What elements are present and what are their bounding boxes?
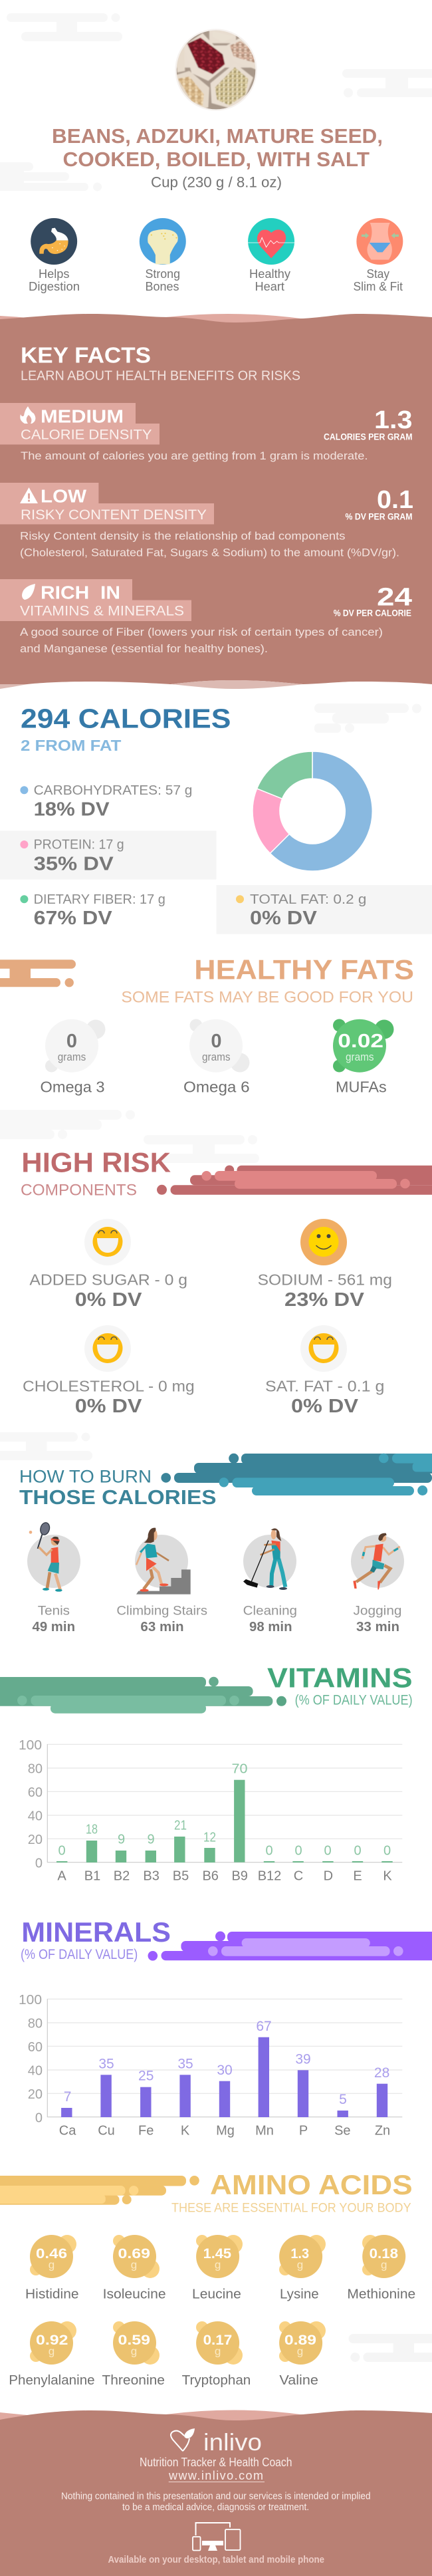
activity: climbing stairs: 63 min <box>140 1620 183 1634</box>
amino: isoleucine: 0.69 <box>118 2246 150 2261</box>
legend: dietary fiber: DIETARY FIBER: 17 g <box>34 892 165 907</box>
heading: amino acids: AMINO ACIDS <box>210 2169 413 2200</box>
x axis labels: B9 <box>231 1868 248 1883</box>
fat: omega 6: Omega 6 <box>183 1079 250 1096</box>
x axis labels: P <box>299 2124 308 2138</box>
title: BEANS, ADZUKI, MATURE SEED, <box>52 125 383 148</box>
legend panels <box>0 831 432 934</box>
icon: smiling face <box>300 1219 347 1265</box>
value labels: 7 <box>64 2089 71 2105</box>
risk: sodium: SODIUM - 561 mg <box>258 1271 392 1289</box>
heading: calories: 294 CALORIES <box>21 703 231 733</box>
title: COOKED, BOILED, WITH SALT <box>62 148 370 171</box>
value labels <box>58 1762 391 1858</box>
fat: omega 6: 0 <box>211 1031 222 1052</box>
x axis labels <box>59 2124 390 2138</box>
amino: phenylalanine <box>9 2321 95 2388</box>
stat: percent DV per calorie: % DV PER CALORIE <box>334 608 411 618</box>
amino: phenylalanine: g <box>49 2345 54 2358</box>
title <box>52 125 383 171</box>
risk: saturated fat <box>265 1325 384 1417</box>
amino: histidine: Histidine <box>25 2287 79 2301</box>
background cloud: above high risk left <box>0 1110 135 1139</box>
legend: dietary fiber <box>20 892 165 929</box>
value labels: 35 <box>98 2057 114 2072</box>
value labels: 67 <box>256 2019 272 2034</box>
x axis labels: B3 <box>143 1868 160 1883</box>
value labels: 0 <box>294 1843 302 1858</box>
decoration: burn calories shape <box>161 1454 432 1495</box>
activity: cleaning: 98 min <box>249 1620 292 1634</box>
value labels: 25 <box>138 2069 154 2084</box>
x axis labels: Ca <box>59 2124 76 2138</box>
amino: histidine: 0.46 <box>36 2246 67 2261</box>
activity: jogging: Jogging <box>354 1604 401 1618</box>
amino: threonine: 0.59 <box>118 2333 150 2348</box>
illustration: man jogging <box>351 1533 404 1589</box>
heading: key facts: KEY FACTS <box>21 343 151 367</box>
y axis labels: 40 <box>28 1809 43 1823</box>
activity: climbing stairs: Climbing Stairs <box>116 1604 207 1618</box>
x axis labels: B6 <box>202 1868 219 1883</box>
text: disclaimer <box>61 2491 371 2513</box>
legend: protein: PROTEIN: 17 g <box>34 838 124 852</box>
value labels: 39 <box>295 2051 311 2067</box>
value labels: 18 <box>86 1823 98 1837</box>
tag: low risky content density <box>0 483 214 524</box>
value labels: 21 <box>174 1819 187 1833</box>
fat: omega 3 <box>40 1019 105 1096</box>
amino: lysine: 1.3 <box>290 2246 309 2261</box>
activity: cleaning <box>243 1528 297 1634</box>
benefit labels: Healthy <box>249 267 291 281</box>
risk: cholesterol: 0% DV <box>75 1396 142 1417</box>
tag: rich in vitamins and minerals: VITAMINS & MINERALS <box>20 603 184 619</box>
activity: tennis: Tenis <box>38 1604 70 1618</box>
fat: omega 6 <box>183 1019 250 1096</box>
icon: stomach <box>31 218 77 265</box>
stat: calories per gram <box>324 406 412 442</box>
illustration: woman on stairs <box>135 1528 191 1595</box>
fat: MUFAs: grams <box>346 1051 374 1063</box>
amino: methionine: g <box>381 2259 387 2271</box>
legend: total fat: TOTAL FAT: 0.2 g <box>250 892 366 907</box>
logo: inlivo: inlivo <box>203 2428 262 2456</box>
icon: slim waist <box>356 218 403 265</box>
subheading: minerals daily value: (% OF DAILY VALUE) <box>21 1947 138 1962</box>
x axis labels: Cu <box>98 2124 115 2138</box>
decoration: high risk shape <box>157 1165 432 1195</box>
background cloud: calories <box>314 704 421 733</box>
risk: cholesterol <box>23 1325 195 1417</box>
chart grid <box>47 1744 402 1839</box>
text: risky content note: Risky Content density is the relationship of bad components <box>20 529 346 543</box>
amino: leucine: 1.45 <box>203 2246 231 2261</box>
value labels <box>64 2019 389 2107</box>
background cloud: top right <box>342 69 432 97</box>
text: website: www.inlivo.com <box>168 2469 263 2482</box>
value labels: 0 <box>324 1843 332 1858</box>
icon: grinning face <box>300 1325 347 1372</box>
y axis labels: 100 <box>19 1738 42 1753</box>
amino: histidine: g <box>49 2259 54 2271</box>
value labels: 0 <box>58 1843 66 1858</box>
x axis labels: Mg <box>216 2124 235 2138</box>
benefit labels <box>29 267 403 293</box>
value labels: 0 <box>265 1843 273 1858</box>
x axis labels: E <box>353 1868 362 1883</box>
activity: cleaning: Cleaning <box>243 1604 297 1618</box>
value labels: 70 <box>231 1762 247 1777</box>
risk: added sugar: 0% DV <box>75 1289 142 1311</box>
serving size: Cup (230 g / 8.1 oz) <box>151 174 282 190</box>
text: disclaimer: Nothing contained in this presentation and our services is intended or implied <box>61 2491 371 2502</box>
amino: methionine <box>347 2235 415 2301</box>
y axis labels: 100 <box>19 1993 42 2007</box>
text: risky content note <box>20 529 399 559</box>
bar chart: vitamins <box>19 1738 402 1883</box>
amino: tryptophan: Tryptophan <box>182 2373 251 2388</box>
subheading: healthy fats: SOME FATS MAY BE GOOD FOR YOU <box>121 989 413 1007</box>
background cloud: left of title <box>0 162 102 192</box>
amino: lysine: g <box>297 2259 303 2271</box>
value labels: 28 <box>374 2065 389 2081</box>
text: risky content note: (Cholesterol, Saturated Fat, Sugars & Sodium) to the amount (%DV/gr). <box>20 547 399 559</box>
decoration: vitamins shape <box>0 1677 286 1714</box>
y axis labels: 20 <box>28 2087 43 2102</box>
text: disclaimer: to be a medical advice, diagnosis or treatment. <box>122 2502 309 2513</box>
fat: MUFAs: 0.02 <box>338 1031 383 1052</box>
legend: total fat <box>236 892 366 929</box>
benefit labels: Slim & Fit <box>354 279 403 293</box>
y axis labels <box>19 1993 43 2125</box>
stat: calories per gram: 1.3 <box>374 406 412 434</box>
subheading: key facts: LEARN ABOUT HEALTH BENEFITS OR RISKS <box>21 368 300 383</box>
amino: isoleucine <box>103 2235 166 2301</box>
icon: grinning face <box>84 1325 131 1372</box>
x axis labels: Mn <box>255 2124 274 2138</box>
y axis labels: 40 <box>28 2064 43 2079</box>
x axis labels: Se <box>334 2124 351 2138</box>
amino: methionine: 0.18 <box>370 2246 398 2261</box>
tag: medium calorie density <box>0 403 160 444</box>
value labels: 9 <box>147 1833 155 1847</box>
activity: jogging: 33 min <box>356 1620 399 1634</box>
heading: vitamins: VITAMINS <box>267 1662 413 1693</box>
risk: saturated fat: SAT. FAT - 0.1 g <box>265 1378 384 1395</box>
amino: leucine: Leucine <box>192 2287 241 2301</box>
y axis labels: 0 <box>35 2111 43 2125</box>
y axis labels: 0 <box>35 1856 43 1870</box>
tag: low risky content density: RISKY CONTENT DENSITY <box>21 507 207 523</box>
fat: omega 3: Omega 3 <box>40 1079 105 1096</box>
text: calorie density note: The amount of calories you are getting from 1 gram is moderate. <box>21 450 368 462</box>
heading: how to burn: HOW TO BURN <box>19 1466 152 1486</box>
y axis labels: 60 <box>28 2040 43 2055</box>
fat: omega 3: 0 <box>66 1031 77 1052</box>
amino: tryptophan <box>182 2321 251 2388</box>
amino: isoleucine: g <box>131 2259 137 2271</box>
heading: minerals: MINERALS <box>21 1916 171 1948</box>
wave: top of key facts, pink layer <box>0 314 432 332</box>
subheading: amino acids: THESE ARE ESSENTIAL FOR YOUR BODY <box>171 2201 411 2215</box>
text: tagline: Nutrition Tracker & Health Coach <box>140 2456 292 2469</box>
background cloud: above burn <box>0 1432 92 1460</box>
value labels: 12 <box>203 1830 216 1845</box>
stat: percent DV per gram <box>346 486 413 521</box>
panel: footer <box>0 2410 432 2576</box>
x axis labels: B12 <box>258 1868 281 1883</box>
amino: threonine <box>102 2321 165 2388</box>
icon: heart with pulse <box>248 218 294 265</box>
amino: phenylalanine: 0.92 <box>36 2333 68 2348</box>
benefit labels: Heart <box>255 279 284 293</box>
subheading: vitamins daily value: (% OF DAILY VALUE) <box>295 1692 413 1708</box>
illustration: tennis player <box>27 1521 80 1592</box>
risk: sodium: 23% DV <box>284 1289 365 1311</box>
x axis labels <box>57 1868 392 1883</box>
benefit labels: Strong <box>145 267 180 281</box>
logo: inlivo <box>171 2428 262 2456</box>
legend: total fat: 0% DV <box>250 908 318 929</box>
donut chart: macronutrients <box>253 751 372 871</box>
risk: cholesterol: CHOLESTEROL - 0 mg <box>23 1378 195 1395</box>
tag: medium calorie density: MEDIUM <box>41 406 124 427</box>
tag: rich in vitamins and minerals <box>0 579 191 621</box>
text: rich in note <box>20 626 383 655</box>
activity: tennis: 49 min <box>32 1620 75 1634</box>
value labels: 0 <box>354 1843 362 1858</box>
legend: carbohydrates <box>20 783 192 821</box>
text: availability: Available on your desktop, tablet and mobile phone <box>108 2555 324 2565</box>
subheading: components: COMPONENTS <box>21 1181 137 1199</box>
activity: climbing stairs <box>116 1528 207 1634</box>
x axis labels: Fe <box>138 2124 154 2138</box>
benefit icons row <box>31 218 403 265</box>
stat: percent DV per gram: % DV PER GRAM <box>346 511 412 521</box>
legend: dietary fiber: 67% DV <box>34 908 112 929</box>
chart grid <box>47 1999 402 2093</box>
icon: bone <box>140 218 186 265</box>
amino: valine <box>279 2321 326 2388</box>
stat: calories per gram: CALORIES PER GRAM <box>324 432 412 442</box>
amino: histidine <box>25 2235 79 2301</box>
background cloud: above high risk centre <box>144 1135 259 1163</box>
text: rich in note: and Manganese (essential for healthy bones). <box>20 642 268 655</box>
y axis labels: 60 <box>28 1785 43 1800</box>
y axis labels: 80 <box>28 1762 43 1777</box>
amino: lysine <box>279 2235 326 2301</box>
icon: warning triangle <box>20 487 38 503</box>
amino: tryptophan: 0.17 <box>203 2333 232 2348</box>
fat: MUFAs <box>333 1019 393 1096</box>
heading: those calories: THOSE CALORIES <box>19 1485 217 1509</box>
icon: grinning face <box>84 1219 131 1265</box>
tag: low risky content density: LOW <box>41 485 87 507</box>
x axis labels: K <box>181 2124 190 2138</box>
risk: added sugar: ADDED SUGAR - 0 g <box>29 1271 187 1289</box>
x axis labels: Zn <box>375 2124 390 2138</box>
amino: leucine: g <box>215 2259 221 2271</box>
activity: tennis <box>27 1521 80 1634</box>
wave: footer pink layer <box>0 2410 432 2434</box>
amino: lysine: Lysine <box>280 2287 319 2301</box>
hero photo: sacks of beans <box>175 29 257 110</box>
x axis labels: C <box>294 1868 303 1883</box>
value labels: 5 <box>339 2092 347 2107</box>
amino: valine: Valine <box>279 2373 318 2388</box>
legend: carbohydrates: 18% DV <box>34 799 110 821</box>
bottom wave: pale lens <box>0 680 303 689</box>
tag: medium calorie density: CALORIE DENSITY <box>21 427 152 443</box>
stat: percent DV per gram: 0.1 <box>377 486 413 514</box>
activity: jogging <box>351 1533 404 1634</box>
x axis labels: A <box>57 1868 66 1883</box>
background cloud: top left <box>7 13 122 41</box>
risk: sodium <box>258 1219 392 1311</box>
heading: healthy fats: HEALTHY FATS <box>194 954 414 985</box>
background cloud: amino right <box>348 2334 432 2362</box>
x axis labels: D <box>324 1868 333 1883</box>
amino: valine: g <box>297 2345 303 2358</box>
fat: omega 6: grams <box>202 1051 231 1063</box>
amino: isoleucine: Isoleucine <box>103 2287 166 2301</box>
benefit labels: Digestion <box>29 279 80 293</box>
value labels: 9 <box>118 1833 125 1847</box>
tag: rich in vitamins and minerals: RICH IN <box>41 582 120 603</box>
y axis labels: 80 <box>28 2016 43 2031</box>
y axis labels <box>19 1738 43 1870</box>
bar chart: minerals <box>19 1993 402 2138</box>
fat: omega 3: grams <box>58 1051 86 1063</box>
value labels: 30 <box>217 2063 233 2078</box>
amino: valine: 0.89 <box>284 2333 316 2348</box>
x axis labels: B1 <box>84 1868 100 1883</box>
decoration: amino acids shape <box>0 2176 199 2205</box>
panel: key facts <box>0 314 432 689</box>
legend: carbohydrates: CARBOHYDRATES: 57 g <box>34 783 192 798</box>
text: rich in note: A good source of Fiber (lowers your risk of certain types of cancer) <box>20 626 383 638</box>
heading: high risk: HIGH RISK <box>21 1147 171 1178</box>
decoration: healthy fats shape <box>0 960 76 987</box>
icon: flame <box>20 406 35 424</box>
amino: methionine: Methionine <box>347 2287 415 2301</box>
bars <box>61 2037 387 2117</box>
value labels: 0 <box>383 1843 391 1858</box>
legend: protein: 35% DV <box>34 853 114 874</box>
legend: protein <box>20 838 124 874</box>
amino: phenylalanine: Phenylalanine <box>9 2373 95 2388</box>
fat: MUFAs: MUFAs <box>336 1079 387 1096</box>
risk: saturated fat: 0% DV <box>291 1396 359 1417</box>
amino: threonine: g <box>131 2345 137 2358</box>
amino: leucine <box>192 2235 243 2301</box>
subheading: from fat: 2 FROM FAT <box>21 737 121 754</box>
benefit labels: Stay <box>367 267 390 281</box>
illustration: woman sweeping <box>243 1528 296 1590</box>
stat: percent DV per calorie <box>334 584 412 618</box>
benefit labels: Bones <box>145 279 179 293</box>
stat: percent DV per calorie: 24 <box>377 584 412 612</box>
y axis labels: 20 <box>28 1833 43 1847</box>
x axis labels: B5 <box>173 1868 189 1883</box>
risk: added sugar <box>29 1219 187 1311</box>
decoration: minerals shape <box>148 1931 432 1961</box>
amino: threonine: Threonine <box>102 2373 165 2388</box>
x axis labels: K <box>383 1868 392 1883</box>
value labels: 35 <box>177 2057 193 2072</box>
icon: leaf <box>22 584 35 600</box>
amino: tryptophan: g <box>215 2345 221 2358</box>
benefit labels: Helps <box>39 267 69 281</box>
x axis labels: B2 <box>114 1868 130 1883</box>
icon: devices <box>193 2523 241 2551</box>
bars <box>56 1780 393 1863</box>
